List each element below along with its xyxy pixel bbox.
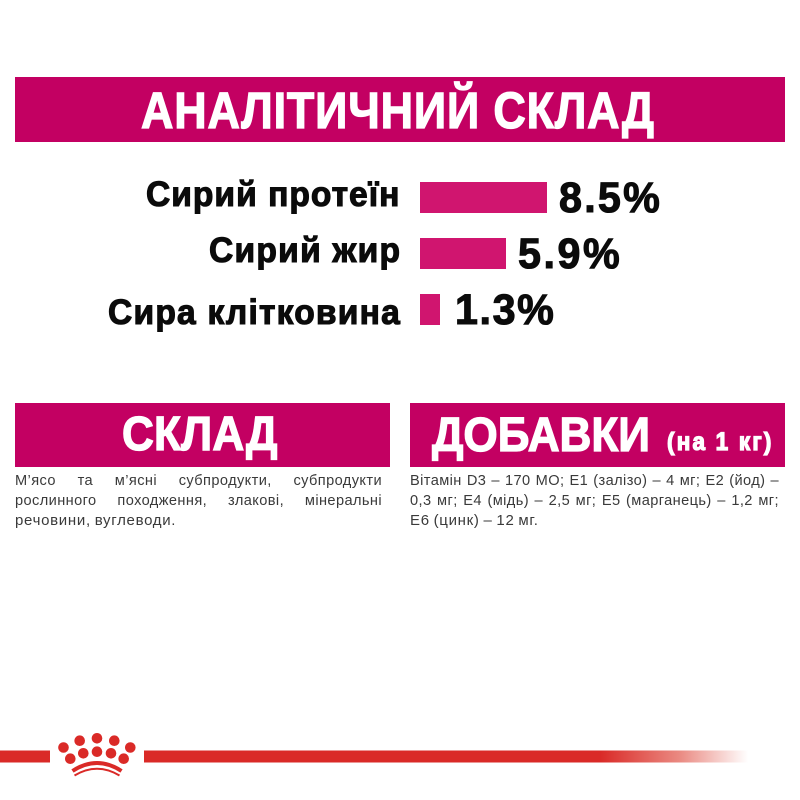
row: crude fat: 5.9% [518, 229, 620, 277]
footer ribbon with crown logo [0, 733, 748, 776]
additives header: ДОБАВКИ [432, 407, 650, 461]
row: crude fibre [108, 285, 554, 333]
additives header [410, 403, 785, 467]
row: crude fibre: Сира клітковина [108, 293, 401, 332]
composition text: речовини, вуглеводи. [15, 512, 176, 529]
title: АНАЛІТИЧНИЙ СКЛАД [141, 81, 654, 140]
row: crude fibre: 1.3% [455, 285, 554, 333]
additives text: 0,3 мг; Е4 (мідь) – 2,5 мг; Е5 (марганець) – 1,2 мг; [410, 492, 779, 508]
row: crude fat: Сирий жир [209, 231, 400, 270]
composition text: рослинного походження, злакові, мінеральні [15, 492, 382, 508]
icon: royal crown [58, 733, 136, 776]
composition text: М’ясо та м’ясні субпродукти, субпродукти [15, 473, 382, 489]
row: crude protein [146, 173, 660, 221]
row: crude protein: 8.5% [559, 173, 660, 221]
additives text: Вітамін D3 – 170 МО; Е1 (залізо) – 4 мг; Е2 (йод) – [410, 473, 779, 489]
composition header: СКЛАД [122, 406, 278, 460]
row: crude protein: Сирий протеїн [146, 175, 399, 214]
row: crude fat [209, 229, 620, 277]
additives text [410, 473, 779, 529]
additives text: Е6 (цинк) – 12 мг. [410, 512, 539, 529]
bar chart: analytical composition [108, 173, 660, 333]
title banner [15, 77, 785, 142]
composition text [15, 473, 382, 529]
additives header: (на 1 кг) [667, 428, 771, 456]
composition header [15, 403, 390, 467]
